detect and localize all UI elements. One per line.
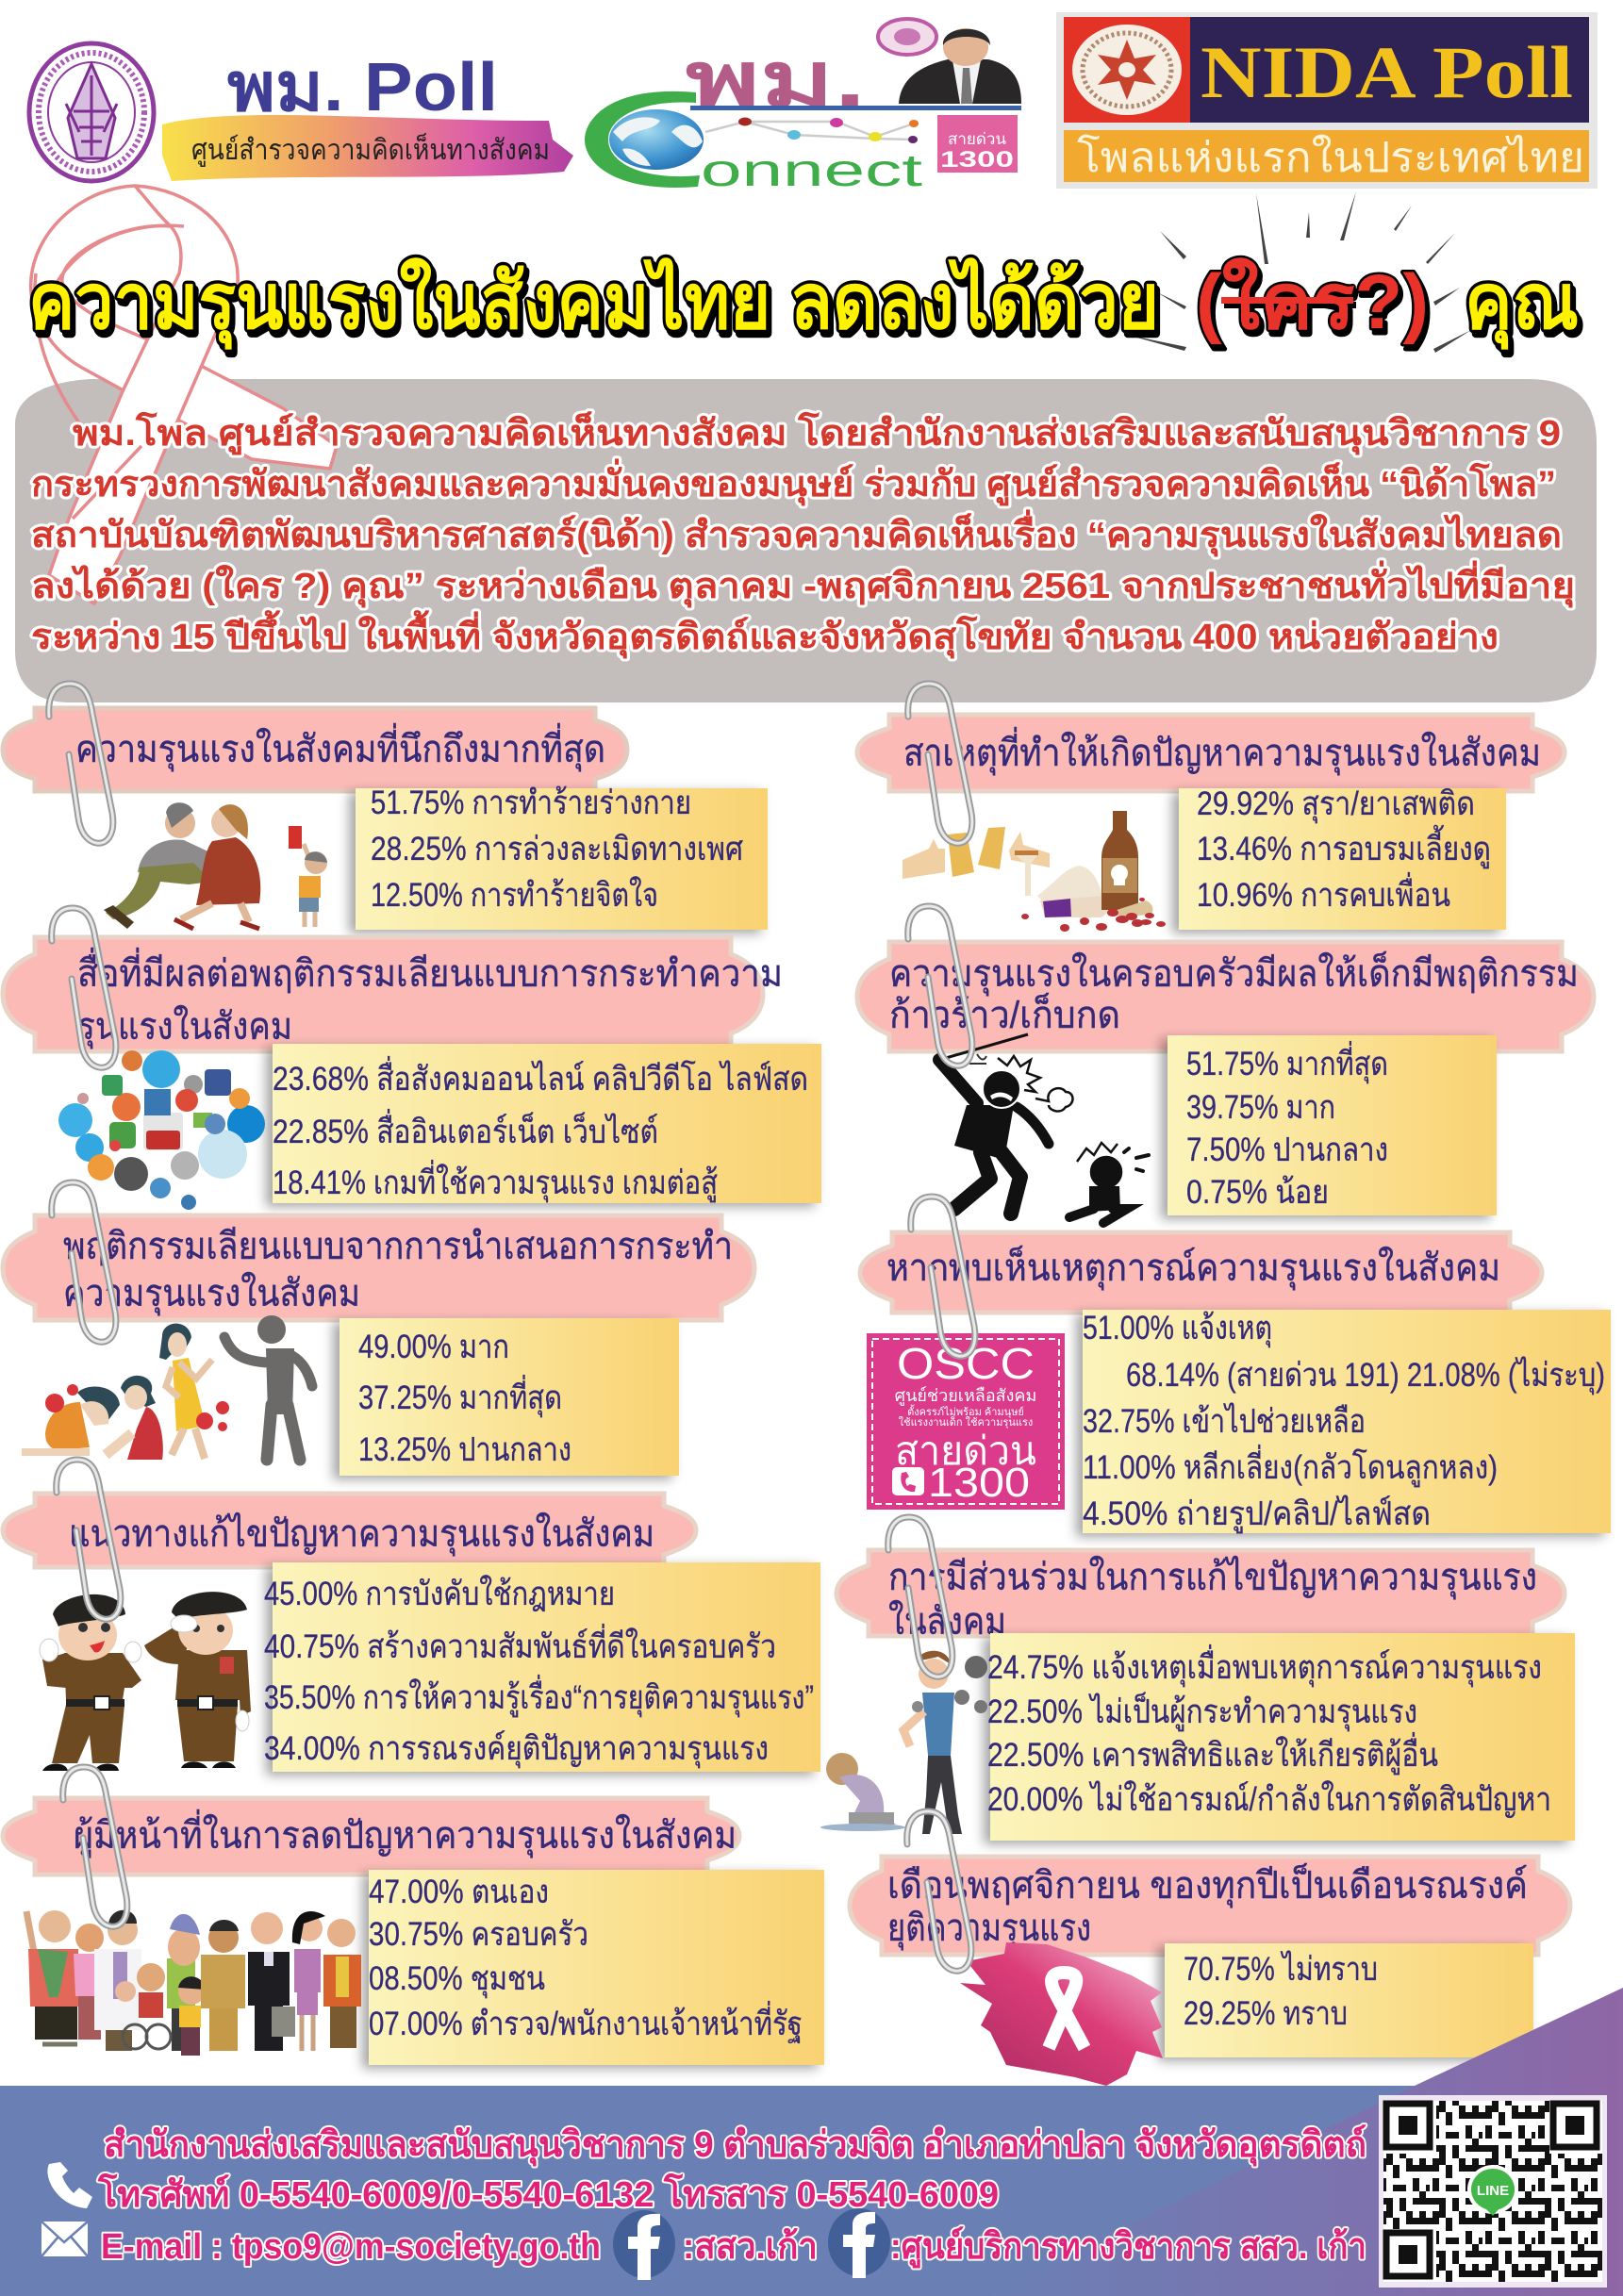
panel: media influencing imitation: สื่อที่มีผลต่อพฤติกรรมเลียนแบบการกระทำความ [77, 948, 783, 995]
panel: participation in solving violence: 24.75% แจ้งเหตุเมื่อพบเหตุการณ์ความรุนแรง [987, 1644, 1542, 1687]
logo: พม. Poll: พม. Poll [227, 50, 498, 125]
facebook page name: :สสว.เก้า [683, 2227, 818, 2267]
footer phone: โทรศัพท์ 0-5540-6009/0-5540-6132 โทรสาร 0-5540-6009 [97, 2172, 999, 2215]
illustration: social media icons [58, 1050, 265, 1210]
panel: responsible parties: 07.00% ตำรวจ/พนักงานเจ้าหน้าที่รัฐ [369, 2001, 803, 2043]
panel: violence most thought of: ความรุนแรงในสังคมที่นึกถึงมากที่สุด [75, 723, 605, 772]
panel: causes of violence: สาเหตุที่ทำให้เกิดปัญหาความรุนแรงในสังคม [903, 727, 1541, 776]
panel: causes of violence: 29.92% สุรา/ยาเสพติด [1197, 785, 1475, 823]
panel: responsible parties: ผู้มีหน้าที่ในการลดปัญหาความรุนแรงในสังคม [74, 1809, 737, 1858]
paperclip [907, 1811, 971, 1971]
paperclip [57, 1460, 121, 1619]
panel: responsible parties: 30.75% ครอบครัว [369, 1916, 588, 1953]
panel: violence most thought of [3, 708, 768, 930]
QR code: LINE [1477, 2183, 1509, 2199]
panel: imitation from violent portrayals: 13.25% ปานกลาง [358, 1431, 571, 1468]
OSCC hotline card: ตั้งครรภ์ไม่พร้อม ค้ามนุษย์ [907, 1404, 1024, 1418]
title: คุณ [1465, 259, 1579, 350]
icon: envelope [41, 2222, 88, 2256]
panel: imitation from violent portrayals: 49.00% มาก [358, 1329, 509, 1365]
panel: family violence and child behaviour: 0.75% น้อย [1186, 1174, 1329, 1211]
panel: family violence and child behaviour: 7.50% ปานกลาง [1186, 1131, 1388, 1168]
title: (ใคร?) [1196, 257, 1429, 345]
paperclip [63, 1767, 127, 1926]
illustration: couple fighting and child with red card [104, 802, 327, 929]
OSCC hotline card: OSCC [897, 1339, 1035, 1388]
footer address: สำนักงานส่งเสริมและสนับสนุนวิชาการ 9 ตำบลร่วมจิต อำเภอท่าปลา จังหวัดอุตรดิตถ์ [104, 2124, 1366, 2167]
paperclip [49, 684, 113, 843]
panel: when witnessing violence: หากพบเห็นเหตุการณ์ความรุนแรงในสังคม [886, 1245, 1500, 1291]
panel: causes of violence: 10.96% การคบเพื่อน [1197, 872, 1450, 914]
logo: พม. Connect: 1300 [940, 147, 1014, 173]
panel: November campaign month: 70.75% ไม่ทราบ [1184, 1950, 1378, 1988]
logo: พม. Connect [585, 19, 1021, 196]
panel: responsible parties: 47.00% ตนเอง [369, 1874, 549, 1910]
panel: participation in solving violence [820, 1550, 1575, 1841]
panel: responsible parties: 08.50% ชุมชน [369, 1960, 545, 1998]
panel: when witnessing violence: 32.75% เข้าไปช่วยเหลือ [1083, 1402, 1366, 1440]
QR code [1379, 2095, 1607, 2288]
introduction text: พม.โพล ศูนย์สำรวจความคิดเห็นทางสังคม โดยสำนักงานส่งเสริมและสนับสนุนวิชาการ 9 [73, 411, 1561, 455]
OSCC hotline card: ศูนย์ช่วยเหลือสังคม [895, 1386, 1036, 1406]
panel: media influencing imitation: 18.41% เกมที่ใช้ความรุนแรง เกมต่อสู้ [273, 1160, 718, 1202]
panel: when witnessing violence: 11.00% หลีกเลี่ยง(กลัวโดนลูกหลง) [1083, 1445, 1498, 1487]
panel: when witnessing violence: 4.50% ถ่ายรูป/คลิป/ไลฟ์สด [1083, 1495, 1431, 1533]
title: ความรุนแรงในสังคมไทย ลดลงได้ด้วย [28, 257, 1159, 350]
illustration: angry man and kneeling person [820, 1651, 987, 1834]
panel: November campaign month: ยุติความรุนแรง [887, 1908, 1091, 1951]
paperclip [52, 908, 116, 1067]
panel: imitation from violent portrayals: 37.25% มากที่สุด [358, 1375, 562, 1417]
panel: causes of violence: 13.46% การอบรมเลี้ยงดู [1197, 824, 1491, 868]
decorative ribbon [31, 186, 337, 603]
illustration: angry adult and scared child [939, 1034, 1149, 1223]
panel: media influencing imitation: รุนแรงในสังคม [77, 1004, 292, 1049]
paperclip [908, 906, 972, 1065]
illustration: two police officers [40, 1592, 251, 1771]
logo: NIDA Poll: NIDA Poll [1201, 31, 1573, 113]
icon: facebook [828, 2208, 890, 2278]
facebook page name: :ศูนย์บริการทางวิชาการ สสว. เก้า [890, 2226, 1366, 2269]
icon: facebook [613, 2210, 675, 2280]
introduction text: ลงได้ด้วย (ใคร ?) คุณ” ระหว่างเดือน ตุลาคม -พฤศจิกายน 2561 จากประชาชนทั่วไปที่มีอายุ [31, 560, 1575, 608]
introduction text: ระหว่าง 15 ปีขึ้นไป ในพื้นที่ จังหวัดอุตรดิตถ์และจังหวัดสุโขทัย จำนวน 400 หน่วยตัวอย่าง [31, 610, 1499, 659]
panel: causes of violence [857, 715, 1565, 932]
logo: พม. Connect: พม. [686, 38, 866, 122]
panel: November campaign month: เดือนพฤศจิกายน ของทุกปีเป็นเดือนรณรงค์ [887, 1862, 1528, 1908]
panel: November campaign month [850, 1857, 1570, 2086]
paperclip [908, 684, 972, 843]
paperclip [911, 1197, 975, 1356]
logo: NIDA Poll [1056, 12, 1598, 189]
illustration: crowd of people [26, 1910, 361, 2056]
logo: ministry seal [29, 43, 154, 181]
footer email: E-mail : tpso9@m-society.go.th [101, 2227, 601, 2267]
OSCC hotline card: 1300 [928, 1460, 1030, 1506]
illustration: alcohol and drugs [903, 811, 1166, 932]
panel: imitation from violent portrayals: ความรุนแรงในสังคม [63, 1271, 360, 1316]
panel: media influencing imitation: 22.85% สื่ออินเตอร์เน็ต เว็บไซต์ [273, 1109, 658, 1150]
panel: when witnessing violence: 51.00% แจ้งเหตุ [1083, 1310, 1272, 1347]
panel: media influencing imitation [3, 937, 821, 1210]
logo: พม. Poll: ศูนย์สำรวจความคิดเห็นทางสังคม [191, 132, 550, 167]
panel: solutions: 35.50% การให้ความรู้เรื่อง“การยุติความรุนแรง” [264, 1675, 814, 1717]
OSCC hotline card [867, 1333, 1065, 1510]
footer [0, 1988, 1623, 2296]
logo: NIDA Poll: โพลแห่งแรกในประเทศไทย [1077, 134, 1584, 181]
panel: family violence and child behaviour: 39.75% มาก [1186, 1089, 1335, 1126]
panel: participation in solving violence: การมีส่วนร่วมในการแก้ไขปัญหาความรุนแรง [888, 1555, 1537, 1600]
panel: participation in solving violence: ในสังคม [888, 1599, 1006, 1643]
icon: phone [47, 2162, 92, 2208]
panel: imitation from violent portrayals [3, 1215, 754, 1476]
panel: solutions: แนวทางแก้ไขปัญหาความรุนแรงในสังคม [69, 1511, 654, 1557]
paperclip [52, 1182, 116, 1342]
illustration: pink brush with white ribbon [960, 1942, 1163, 2086]
panel: media influencing imitation: 23.68% สื่อสังคมออนไลน์ คลิปวีดีโอ ไลฟ์สด [273, 1056, 808, 1098]
panel: family violence and child behaviour [857, 942, 1594, 1223]
panel: solutions: 45.00% การบังคับใช้กฎหมาย [264, 1575, 615, 1612]
logo: พม. Poll [162, 50, 573, 181]
panel: November campaign month: 29.25% ทราบ [1184, 1995, 1348, 2032]
panel: violence most thought of: 12.50% การทำร้ายจิตใจ [371, 876, 658, 914]
logo: พม. Connect: onnect [701, 146, 922, 196]
panel: solutions: 40.75% สร้างความสัมพันธ์ที่ดีในครอบครัว [264, 1624, 776, 1665]
panel: solutions [3, 1494, 820, 1772]
illustration: victims and grey aggressor [22, 1315, 312, 1460]
introduction text: สถาบันบัณฑิตพัฒนบริหารศาสตร์(นิด้า) สำรวจความคิดเห็นเรื่อง “ความรุนแรงในสังคมไทยลด [31, 509, 1562, 557]
panel: imitation from violent portrayals: พฤติกรรมเลียนแบบจากการนำเสนอการกระทำ [63, 1226, 733, 1267]
panel: violence most thought of: 28.25% การล่วงละเมิดทางเพศ [371, 831, 743, 867]
panel: participation in solving violence: 22.50% เคารพสิทธิและให้เกียรติผู้อื่น [987, 1732, 1438, 1775]
panel: solutions: 34.00% การรณรงค์ยุติปัญหาความรุนแรง [264, 1730, 769, 1768]
panel: family violence and child behaviour: 51.75% มากที่สุด [1186, 1041, 1388, 1083]
introduction text: กระทรวงการพัฒนาสังคมและความมั่นคงของมนุษย์ ร่วมกับ ศูนย์สำรวจความคิดเห็น “นิด้าโพล” [31, 458, 1556, 506]
panel: introduction background [15, 379, 1597, 702]
panel: participation in solving violence: 22.50% ไม่เป็นผู้กระทำความรุนแรง [987, 1692, 1417, 1731]
burst lines around (ใคร?) [1127, 191, 1471, 353]
panel: violence most thought of: 51.75% การทำร้ายร่างกาย [371, 785, 691, 821]
OSCC hotline card: ใช้แรงงานเด็ก ใช้ความรุนแรง [899, 1415, 1033, 1429]
panel: responsible parties [3, 1798, 824, 2065]
paperclip [888, 1517, 952, 1677]
OSCC hotline card: สายด่วน [895, 1429, 1036, 1473]
logo: พม. Connect: สายด่วน [948, 130, 1006, 148]
panel: family violence and child behaviour: ก้าวร้าว/เก็บกด [889, 992, 1120, 1036]
panel: when witnessing violence [860, 1232, 1611, 1533]
introduction text [31, 411, 1575, 659]
